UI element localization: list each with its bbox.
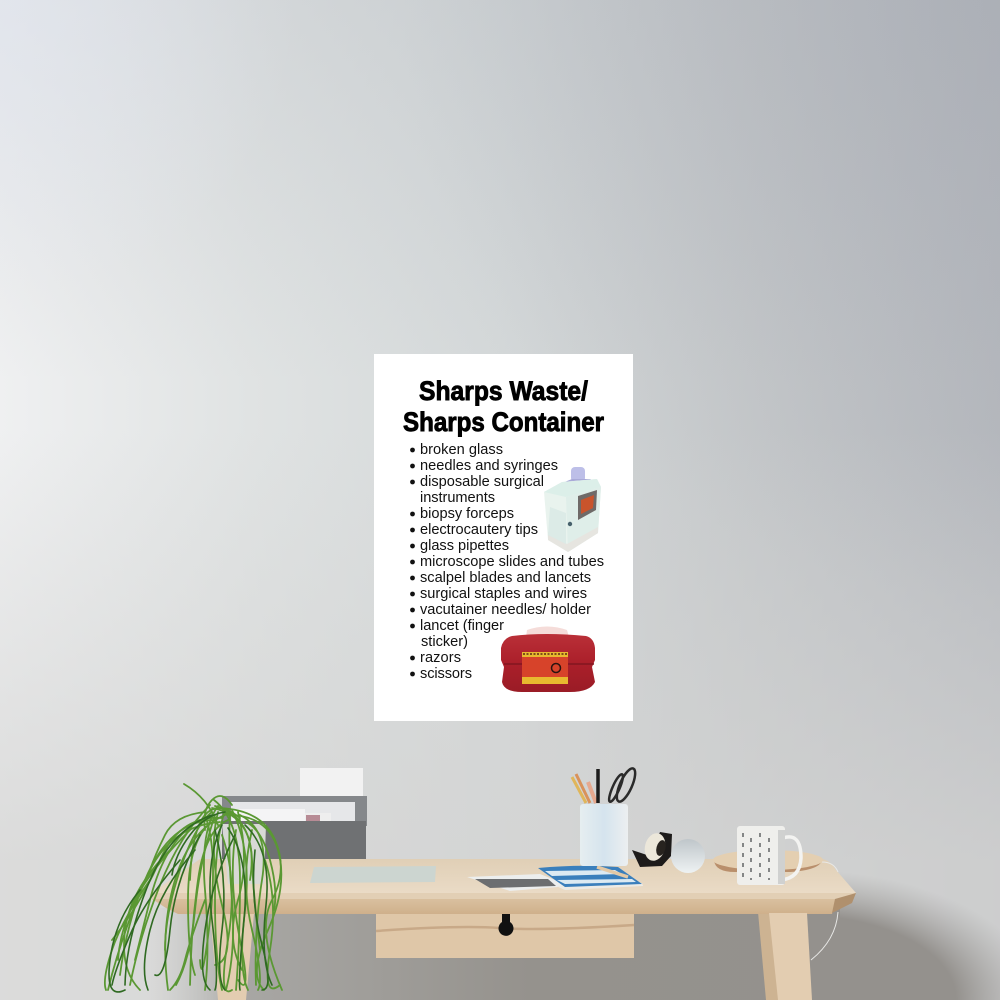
desk corner chamfer bbox=[832, 893, 856, 913]
handle bbox=[781, 837, 801, 880]
organiser bbox=[222, 768, 367, 867]
list of sharps items: scalpel blades and lancets bbox=[420, 570, 591, 586]
list of sharps items: vacutainer needles/ holder bbox=[420, 602, 591, 618]
title: Sharps Waste/ bbox=[419, 376, 588, 406]
list of sharps items: scissors bbox=[420, 666, 472, 682]
list of sharps items: sticker) bbox=[421, 634, 468, 650]
list of sharps items bbox=[410, 442, 604, 682]
desk front lip bbox=[152, 893, 856, 900]
list of sharps items: glass pipettes bbox=[420, 538, 509, 554]
list of sharps items: instruments bbox=[420, 490, 495, 506]
title bbox=[403, 376, 604, 437]
pot bbox=[222, 824, 266, 884]
list of sharps items: microscope slides and tubes bbox=[420, 554, 604, 570]
wooden tray bbox=[713, 850, 823, 872]
list of sharps items: lancet (finger bbox=[420, 618, 504, 634]
tape dispenser bbox=[632, 831, 672, 867]
desk bbox=[152, 859, 856, 1000]
pencils bbox=[572, 777, 586, 803]
list of sharps items: biopsy forceps bbox=[420, 506, 514, 522]
glass ball bbox=[671, 839, 705, 873]
mug body bbox=[737, 826, 785, 885]
list of sharps items: broken glass bbox=[420, 442, 503, 458]
plant bbox=[105, 784, 282, 992]
wall shadow right of desk bbox=[840, 870, 1000, 1000]
poster bbox=[374, 354, 633, 721]
desk front edge bbox=[152, 899, 836, 914]
drawer notch bbox=[498, 914, 514, 936]
paper on desk bbox=[310, 866, 436, 883]
icon: red sharps container bbox=[501, 626, 595, 692]
list of sharps items: needles and syringes bbox=[420, 458, 558, 474]
cup bbox=[580, 804, 628, 866]
list of sharps items: electrocautery tips bbox=[420, 522, 538, 538]
strands bbox=[105, 784, 282, 991]
list of sharps items: surgical staples and wires bbox=[420, 586, 587, 602]
desk back leg bbox=[758, 912, 786, 1000]
power cable bbox=[811, 862, 838, 960]
scissors bbox=[607, 766, 639, 804]
desk top surface bbox=[152, 859, 856, 893]
left leg bbox=[210, 914, 254, 1000]
mug bbox=[737, 826, 801, 885]
title: Sharps Container bbox=[403, 407, 604, 437]
icon: white sharps container bbox=[544, 467, 601, 552]
front leg bbox=[769, 913, 812, 1000]
wall shadow under desk bbox=[150, 908, 840, 1000]
list of sharps items: disposable surgical bbox=[420, 474, 544, 490]
pencil cup bbox=[572, 766, 639, 866]
white card bbox=[300, 768, 363, 798]
notebook and print bbox=[467, 866, 643, 891]
list of sharps items: razors bbox=[420, 650, 461, 666]
poster sheet bbox=[374, 354, 633, 721]
drawer bbox=[376, 914, 634, 958]
